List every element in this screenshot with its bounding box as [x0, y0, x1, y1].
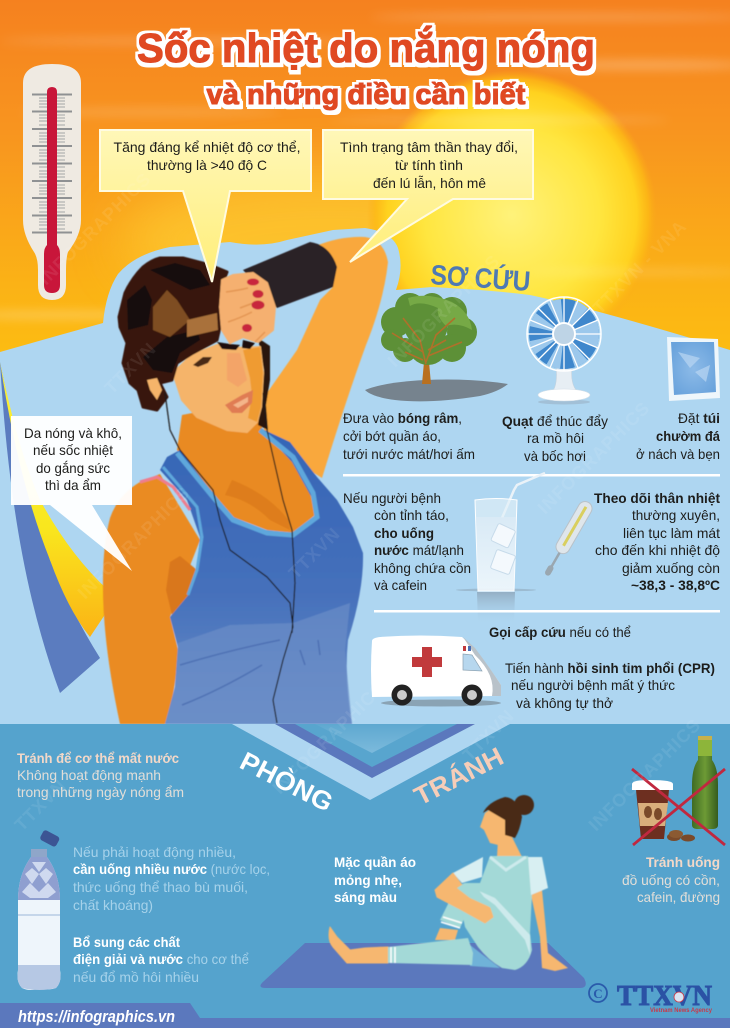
- lip highlight: [233, 397, 248, 408]
- extended leg: [388, 938, 473, 965]
- text: drink more water: thức uống thể thao bù muối,: [73, 879, 248, 895]
- text: avoid drinks: đồ uống có cồn,: [622, 872, 720, 888]
- shoulder strap trim: [163, 467, 202, 595]
- tank top: [160, 428, 363, 724]
- text: clothing: Mặc quần áo: [334, 854, 416, 870]
- background: orange sky with sun: [0, 0, 730, 380]
- text: avoid dehydration: trong những ngày nóng ẩm: [17, 784, 184, 800]
- watermarks: TTXVN: [11, 775, 70, 835]
- callout: body temperature: [100, 130, 311, 282]
- right cheek shade: [243, 347, 263, 422]
- logo: TTXVN: C: [593, 986, 603, 1001]
- text: CPR: nếu người bệnh mất ý thức: [511, 677, 675, 693]
- text: monitor temperature: giảm xuống còn: [622, 560, 720, 576]
- text: ice pack: Đặt túi: [678, 410, 720, 426]
- text: shade: Đưa vào bóng râm,: [343, 410, 462, 426]
- earphone cables: [165, 393, 295, 723]
- text: drink more water: cần uống nhiều nước (nước lọc,: [73, 861, 270, 877]
- text: avoid drinks: [622, 854, 720, 905]
- extended foot and shin: [329, 927, 388, 963]
- hair: [119, 258, 227, 410]
- woman illustration: [103, 237, 388, 724]
- watermarks: TTXVN: [101, 338, 160, 398]
- watermarks: INFOGRAPHICS: [74, 483, 194, 603]
- ankle behind bent leg: [435, 928, 458, 940]
- title: Sốc nhiệt do nắng nóng: [137, 25, 595, 71]
- hand: [220, 273, 275, 343]
- text: drink: còn tỉnh táo,: [374, 507, 449, 523]
- text: drink: không chứa cồn: [374, 560, 471, 576]
- footer bar with url: https://infographics.vn: [18, 1007, 175, 1026]
- watermarks: INFOGRAPHICS: [35, 169, 155, 289]
- hip patch: [470, 945, 500, 968]
- eye: [193, 357, 212, 367]
- text: drink: và cafein: [374, 577, 427, 593]
- icon: fan: [527, 297, 601, 404]
- text: monitor temperature: [594, 490, 720, 593]
- watermarks: TTXVN: [459, 705, 518, 765]
- icon: tree: [365, 293, 508, 401]
- text: drink more water: chất khoáng): [73, 897, 153, 913]
- finger lines: [226, 288, 265, 342]
- watermarks: INFOGRAPHICS: [585, 715, 705, 835]
- ear: [147, 378, 162, 400]
- callout: mental state: Tình trạng tâm thần thay đổi,: [340, 139, 518, 155]
- text: avoid dehydration: Tránh để cơ thể mất nước: [17, 750, 179, 766]
- text: drink: Nếu người bệnh: [343, 490, 441, 506]
- watermarks: INFOGRAPHICS: [269, 678, 389, 798]
- text: CPR: Tiến hành hồi sinh tim phổi (CPR): [505, 660, 715, 676]
- logo: TTXVN: Vietnam News Agency: [650, 1008, 713, 1014]
- knee over arm: [457, 883, 492, 908]
- text: monitor temperature: thường xuyên,: [632, 507, 720, 523]
- lips: [225, 390, 253, 413]
- hair under hand: [217, 340, 255, 350]
- divider: [374, 610, 720, 612]
- callout: skin: [11, 416, 132, 571]
- text: drink more water: [73, 844, 270, 913]
- face: [173, 345, 263, 432]
- text: ice pack: ở nách và bẹn: [636, 446, 720, 462]
- callout: body temperature: thường là >40 độ C: [147, 157, 267, 173]
- heading: phong: PHÒNG: [235, 746, 338, 818]
- red cross-out: [632, 769, 725, 845]
- yoga woman: [329, 795, 568, 971]
- callout: skin: Da nóng và khô,: [24, 425, 122, 441]
- text: clothing: mỏng nhẹ,: [334, 872, 402, 888]
- text: clothing: [334, 854, 416, 905]
- tank top wet lower patch: [165, 603, 352, 724]
- text: drink more water: Nếu phải hoạt động nhiều,: [73, 844, 236, 860]
- v neck collar: [490, 857, 526, 870]
- chevron divider: [232, 724, 510, 800]
- text: avoid dehydration: [17, 750, 184, 800]
- text: avoid dehydration: Không hoạt động mạnh: [17, 767, 161, 783]
- text: ice pack: chườm đá: [656, 428, 720, 444]
- icon: clinical thermometer: [540, 499, 595, 579]
- shirt fold: [470, 887, 530, 955]
- text: drink: cho uống: [374, 525, 434, 541]
- raised arm: [264, 237, 388, 478]
- text: fan: ra mồ hôi: [527, 430, 584, 446]
- callout: skin: nếu sốc nhiệt: [33, 442, 113, 458]
- icon: glass of water with straw: [456, 473, 545, 625]
- footer bar with url: [0, 1003, 730, 1028]
- title: và những điều cần biết: [206, 79, 526, 111]
- text: clothing: sáng màu: [334, 889, 397, 905]
- callout: mental state: [323, 130, 533, 262]
- text: monitor temperature: liên tục làm mát: [623, 525, 720, 541]
- coffee cup: [636, 790, 669, 839]
- text: monitor temperature: cho đến khi nhiệt độ: [595, 542, 720, 558]
- text: electrolytes: Bổ sung các chất: [73, 934, 180, 950]
- callout: mental state: đến lú lẫn, hôn mê: [373, 175, 486, 191]
- text: CPR: [505, 660, 715, 711]
- text: CPR: và không tự thở: [516, 695, 613, 711]
- thermometer: [23, 64, 81, 300]
- text: avoid drinks: cafein, đường: [637, 889, 720, 905]
- callout: body temperature: Tăng đáng kể nhiệt độ cơ thể,: [114, 139, 300, 155]
- text: fan: và bốc hơi: [524, 448, 586, 464]
- shin stripes: [441, 917, 462, 928]
- watermarks: TTXVN - VNA: [589, 216, 691, 318]
- icon: water bottle: [18, 829, 60, 990]
- ankle stripes: [391, 947, 395, 963]
- armpit shade: [166, 556, 197, 615]
- decoration: yellow and blue ribbons: [0, 362, 108, 693]
- pink bra strap: [140, 477, 190, 510]
- face: [480, 806, 512, 845]
- rear arm: [531, 890, 568, 971]
- chest shading: [225, 480, 290, 530]
- text: avoid drinks: Tránh uống: [646, 854, 720, 870]
- hair strand behind face: [258, 338, 270, 430]
- red nails: [242, 278, 264, 332]
- watermarks: INFOGRAPHICS: [384, 251, 504, 371]
- wristband: [243, 242, 337, 308]
- text: monitor temperature: Theo dõi thân nhiệt: [594, 490, 720, 506]
- brown hair highlights: [153, 290, 190, 337]
- coffee beans: [667, 833, 681, 841]
- text: electrolytes: điện giải và nước cho cơ thể: [73, 951, 249, 967]
- callout: skin: thì da ẩm: [45, 477, 101, 493]
- text: fan: Quạt để thúc đẩy: [502, 413, 608, 429]
- heading: tranh: TRÁNH: [409, 741, 508, 811]
- beer bottle: [692, 737, 718, 829]
- shoulder and upper arm: [103, 474, 200, 724]
- title: [137, 25, 595, 111]
- hair and bun: [483, 797, 522, 838]
- text: ice pack: [636, 410, 720, 462]
- bent arm: [435, 873, 493, 923]
- callout: mental state: từ tính tình: [395, 157, 463, 173]
- icon: ambulance: [371, 636, 501, 706]
- icon: ice pack: [667, 337, 720, 401]
- nose: [227, 353, 247, 387]
- panel: prevention: [0, 724, 730, 1028]
- text: monitor temperature: ~38,3 - 38,8ºC: [631, 577, 720, 593]
- text: shade line 3: tưới nước mát/hơi ấm: [343, 446, 475, 462]
- neck and chest: [177, 400, 315, 533]
- heading: so cuu: SƠ CỨU: [430, 259, 532, 297]
- divider: [343, 474, 720, 476]
- logo: TTXVN: TTXVN: [617, 980, 712, 1012]
- panel: light-blue first-aid background: [0, 228, 730, 730]
- callout: skin: do gắng sức: [36, 460, 110, 476]
- watermarks: TTXVN: [285, 523, 344, 583]
- watermarks: [11, 169, 705, 835]
- neckline trim: [177, 430, 317, 535]
- icon: no coffee, no alcohol: [632, 736, 725, 845]
- text: drink: [343, 490, 471, 593]
- logo: TTXVN: [589, 980, 713, 1014]
- text: shade line 2: cởi bớt quần áo,: [343, 428, 441, 444]
- neck: [497, 837, 522, 857]
- text: electrolytes: [73, 934, 249, 985]
- dark hair patches: [127, 263, 210, 373]
- bent shin: [440, 883, 470, 928]
- torso and thigh: [457, 856, 532, 970]
- text: call ambulance: Gọi cấp cứu nếu có thể: [489, 624, 631, 640]
- text: fan: [502, 413, 608, 464]
- text: drink: nước mát/lạnh: [374, 542, 464, 558]
- text: electrolytes: nếu đổ mồ hôi nhiều: [73, 969, 199, 985]
- watermarks: INFOGRAPHICS: [534, 398, 654, 518]
- shirt wrinkles: [180, 640, 320, 705]
- lighter hair highlight: [187, 313, 218, 337]
- yoga mat: [260, 943, 586, 988]
- sleeves: [453, 857, 483, 883]
